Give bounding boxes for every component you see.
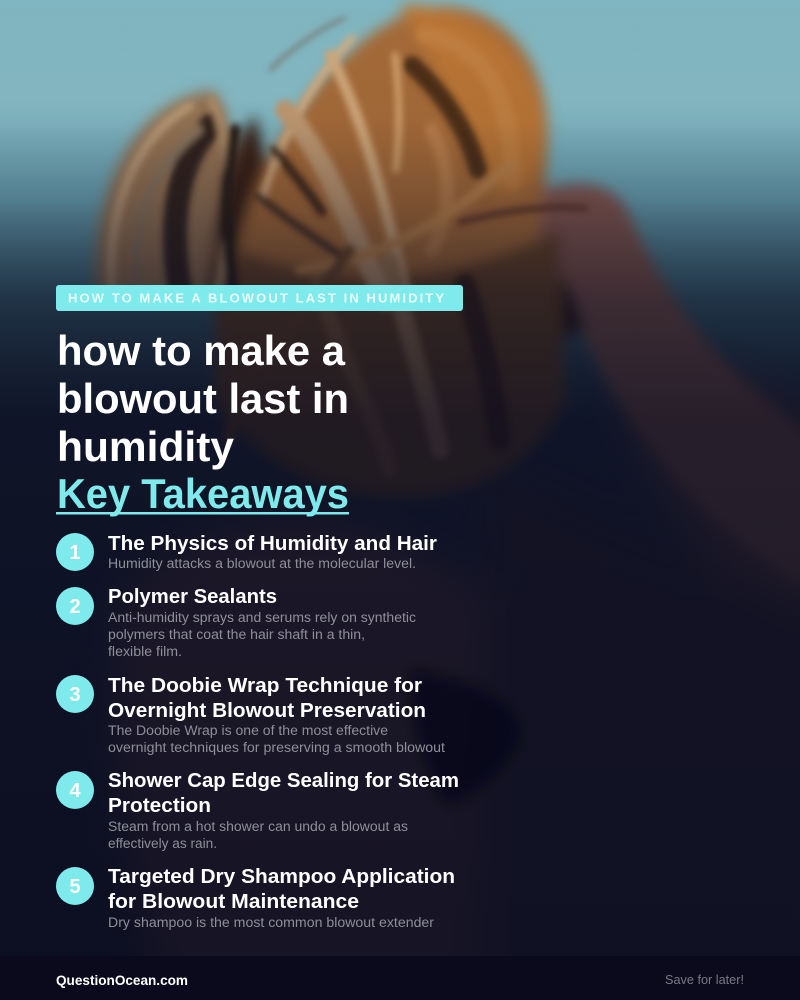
- badge 4: 4: [69, 780, 81, 802]
- badge 5: [56, 867, 94, 905]
- description 2: [108, 610, 416, 659]
- description 4: Steam from a hot shower can undo a blowout as: [108, 819, 408, 834]
- heading 3: [108, 674, 426, 722]
- badge 1: 1: [69, 542, 81, 564]
- badge 2: 2: [69, 596, 81, 618]
- title: [57, 327, 349, 470]
- heading 5: for Blowout Maintenance: [108, 890, 359, 913]
- heading 4: [108, 769, 459, 817]
- takeaway 1: [56, 532, 437, 571]
- title: blowout last in: [57, 375, 349, 422]
- badge 5: 5: [69, 876, 81, 898]
- takeaway 5: [56, 865, 455, 930]
- description 2: Anti-humidity sprays and serums rely on synthetic: [108, 610, 416, 625]
- heading 5: Targeted Dry Shampoo Application: [108, 865, 455, 888]
- badge 1: [56, 533, 94, 571]
- heading 3: Overnight Blowout Preservation: [108, 699, 426, 722]
- badge 3: [56, 675, 94, 713]
- description 1: Humidity attacks a blowout at the molecular level.: [108, 556, 416, 571]
- hair tips behind the list: [410, 670, 519, 805]
- footer bar: [0, 956, 800, 1000]
- subtitle: key takeaways: Key Takeaways: [57, 470, 349, 517]
- description 3: The Doobie Wrap is one of the most effective: [108, 723, 388, 738]
- badge 3: 3: [69, 684, 81, 706]
- heading 2: Polymer Sealants: [108, 585, 277, 608]
- eyebrow tag: HOW TO MAKE A BLOWOUT LAST IN HUMIDITY: [68, 290, 444, 306]
- description 4: effectively as rain.: [108, 836, 217, 851]
- heading 5: [108, 865, 455, 913]
- footer brand: QuestionOcean.com: [56, 973, 188, 988]
- eyebrow tag: [56, 285, 463, 311]
- description 5: Dry shampoo is the most common blowout extender: [108, 915, 435, 930]
- footer note: Save for later!: [665, 972, 744, 987]
- badge 4: [56, 771, 94, 809]
- heading 4: Shower Cap Edge Sealing for Steam: [108, 769, 459, 792]
- description 3: [108, 723, 445, 755]
- takeaway 2: [56, 585, 416, 659]
- heading 3: The Doobie Wrap Technique for: [108, 674, 422, 697]
- description 4: [108, 819, 408, 851]
- description 2: polymers that coat the hair shaft in a thin,: [108, 627, 365, 642]
- description 2: flexible film.: [108, 644, 182, 659]
- heading 1: The Physics of Humidity and Hair: [108, 532, 437, 555]
- heading 4: Protection: [108, 794, 211, 817]
- takeaway 4: [56, 769, 459, 851]
- description 3: overnight techniques for preserving a smooth blowout: [108, 740, 445, 755]
- title: humidity: [57, 423, 235, 470]
- title: how to make a: [57, 327, 346, 374]
- badge 2: [56, 587, 94, 625]
- takeaway 3: [56, 674, 445, 755]
